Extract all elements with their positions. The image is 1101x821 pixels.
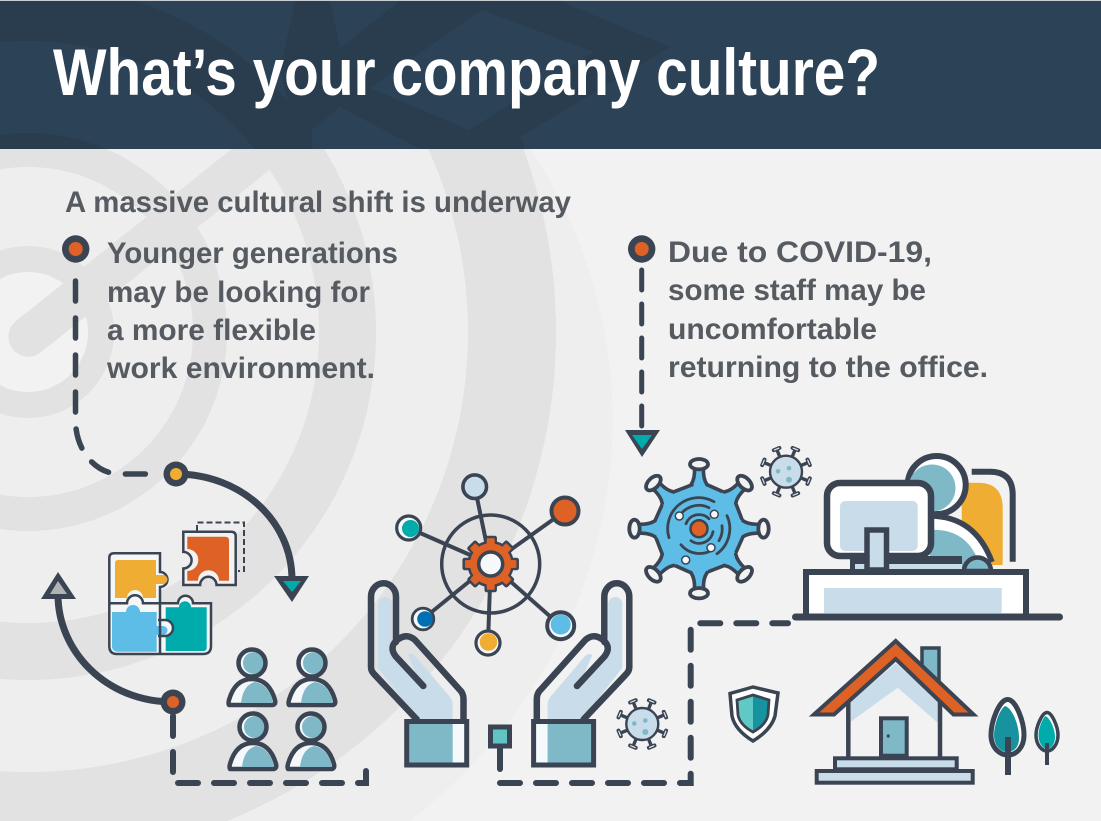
icon: house (814, 641, 974, 783)
chair (962, 472, 1013, 565)
person (908, 456, 994, 571)
dashed connector: bottom left (173, 716, 366, 783)
steps (817, 758, 973, 783)
roof (814, 641, 974, 714)
icon: gear (464, 537, 518, 591)
door (881, 718, 907, 756)
dashed connector: bottom right (500, 623, 788, 783)
icon: large tree (991, 700, 1024, 775)
text block: COVID-19 (668, 236, 988, 384)
icon: right hand (534, 583, 629, 765)
text block: COVID-19: returning to the office. (668, 351, 988, 384)
monitor (827, 483, 962, 570)
text block: younger generations (106, 237, 398, 385)
text block: younger generations: may be looking for (107, 276, 370, 309)
dashed arrow: COVID bullet to virus (625, 235, 660, 457)
text block: younger generations: a more flexible (107, 314, 316, 347)
icon: puzzle (109, 522, 244, 654)
node: orange (552, 498, 578, 524)
icon: left hand (371, 583, 467, 765)
text block: COVID-19: some staff may be (668, 274, 926, 307)
arrow: curved down to people (164, 462, 309, 602)
node: teal (397, 516, 421, 540)
node: yellow (476, 631, 500, 655)
text block: COVID-19: Due to COVID-19, (668, 236, 932, 269)
text block: younger generations: Younger generations (107, 237, 398, 270)
chimney (922, 648, 939, 682)
text block: younger generations: work environment. (106, 352, 375, 385)
desk (796, 572, 1060, 617)
icon: large virus (629, 459, 769, 598)
title: What’s your company culture? (53, 35, 880, 109)
icon: small virus upper (762, 448, 810, 495)
icon: shield (730, 687, 778, 741)
subheading: A massive cultural shift is underway (65, 186, 572, 219)
node: light blue (547, 612, 574, 639)
network: gear and nodes (397, 475, 578, 655)
node: top (463, 475, 487, 499)
icon: small virus lower (619, 700, 666, 748)
walls (848, 660, 940, 757)
icon: small tree (1036, 712, 1058, 765)
header band (0, 0, 1101, 149)
icon: small square node (490, 727, 510, 769)
node: dark blue (412, 608, 434, 630)
dashed connector: left bullet to puzzle arc (62, 235, 146, 474)
icon: person at desk (796, 456, 1060, 617)
text block: COVID-19: uncomfortable (668, 313, 877, 346)
icon: people (228, 648, 335, 769)
arrow: curved up from people (41, 572, 186, 714)
